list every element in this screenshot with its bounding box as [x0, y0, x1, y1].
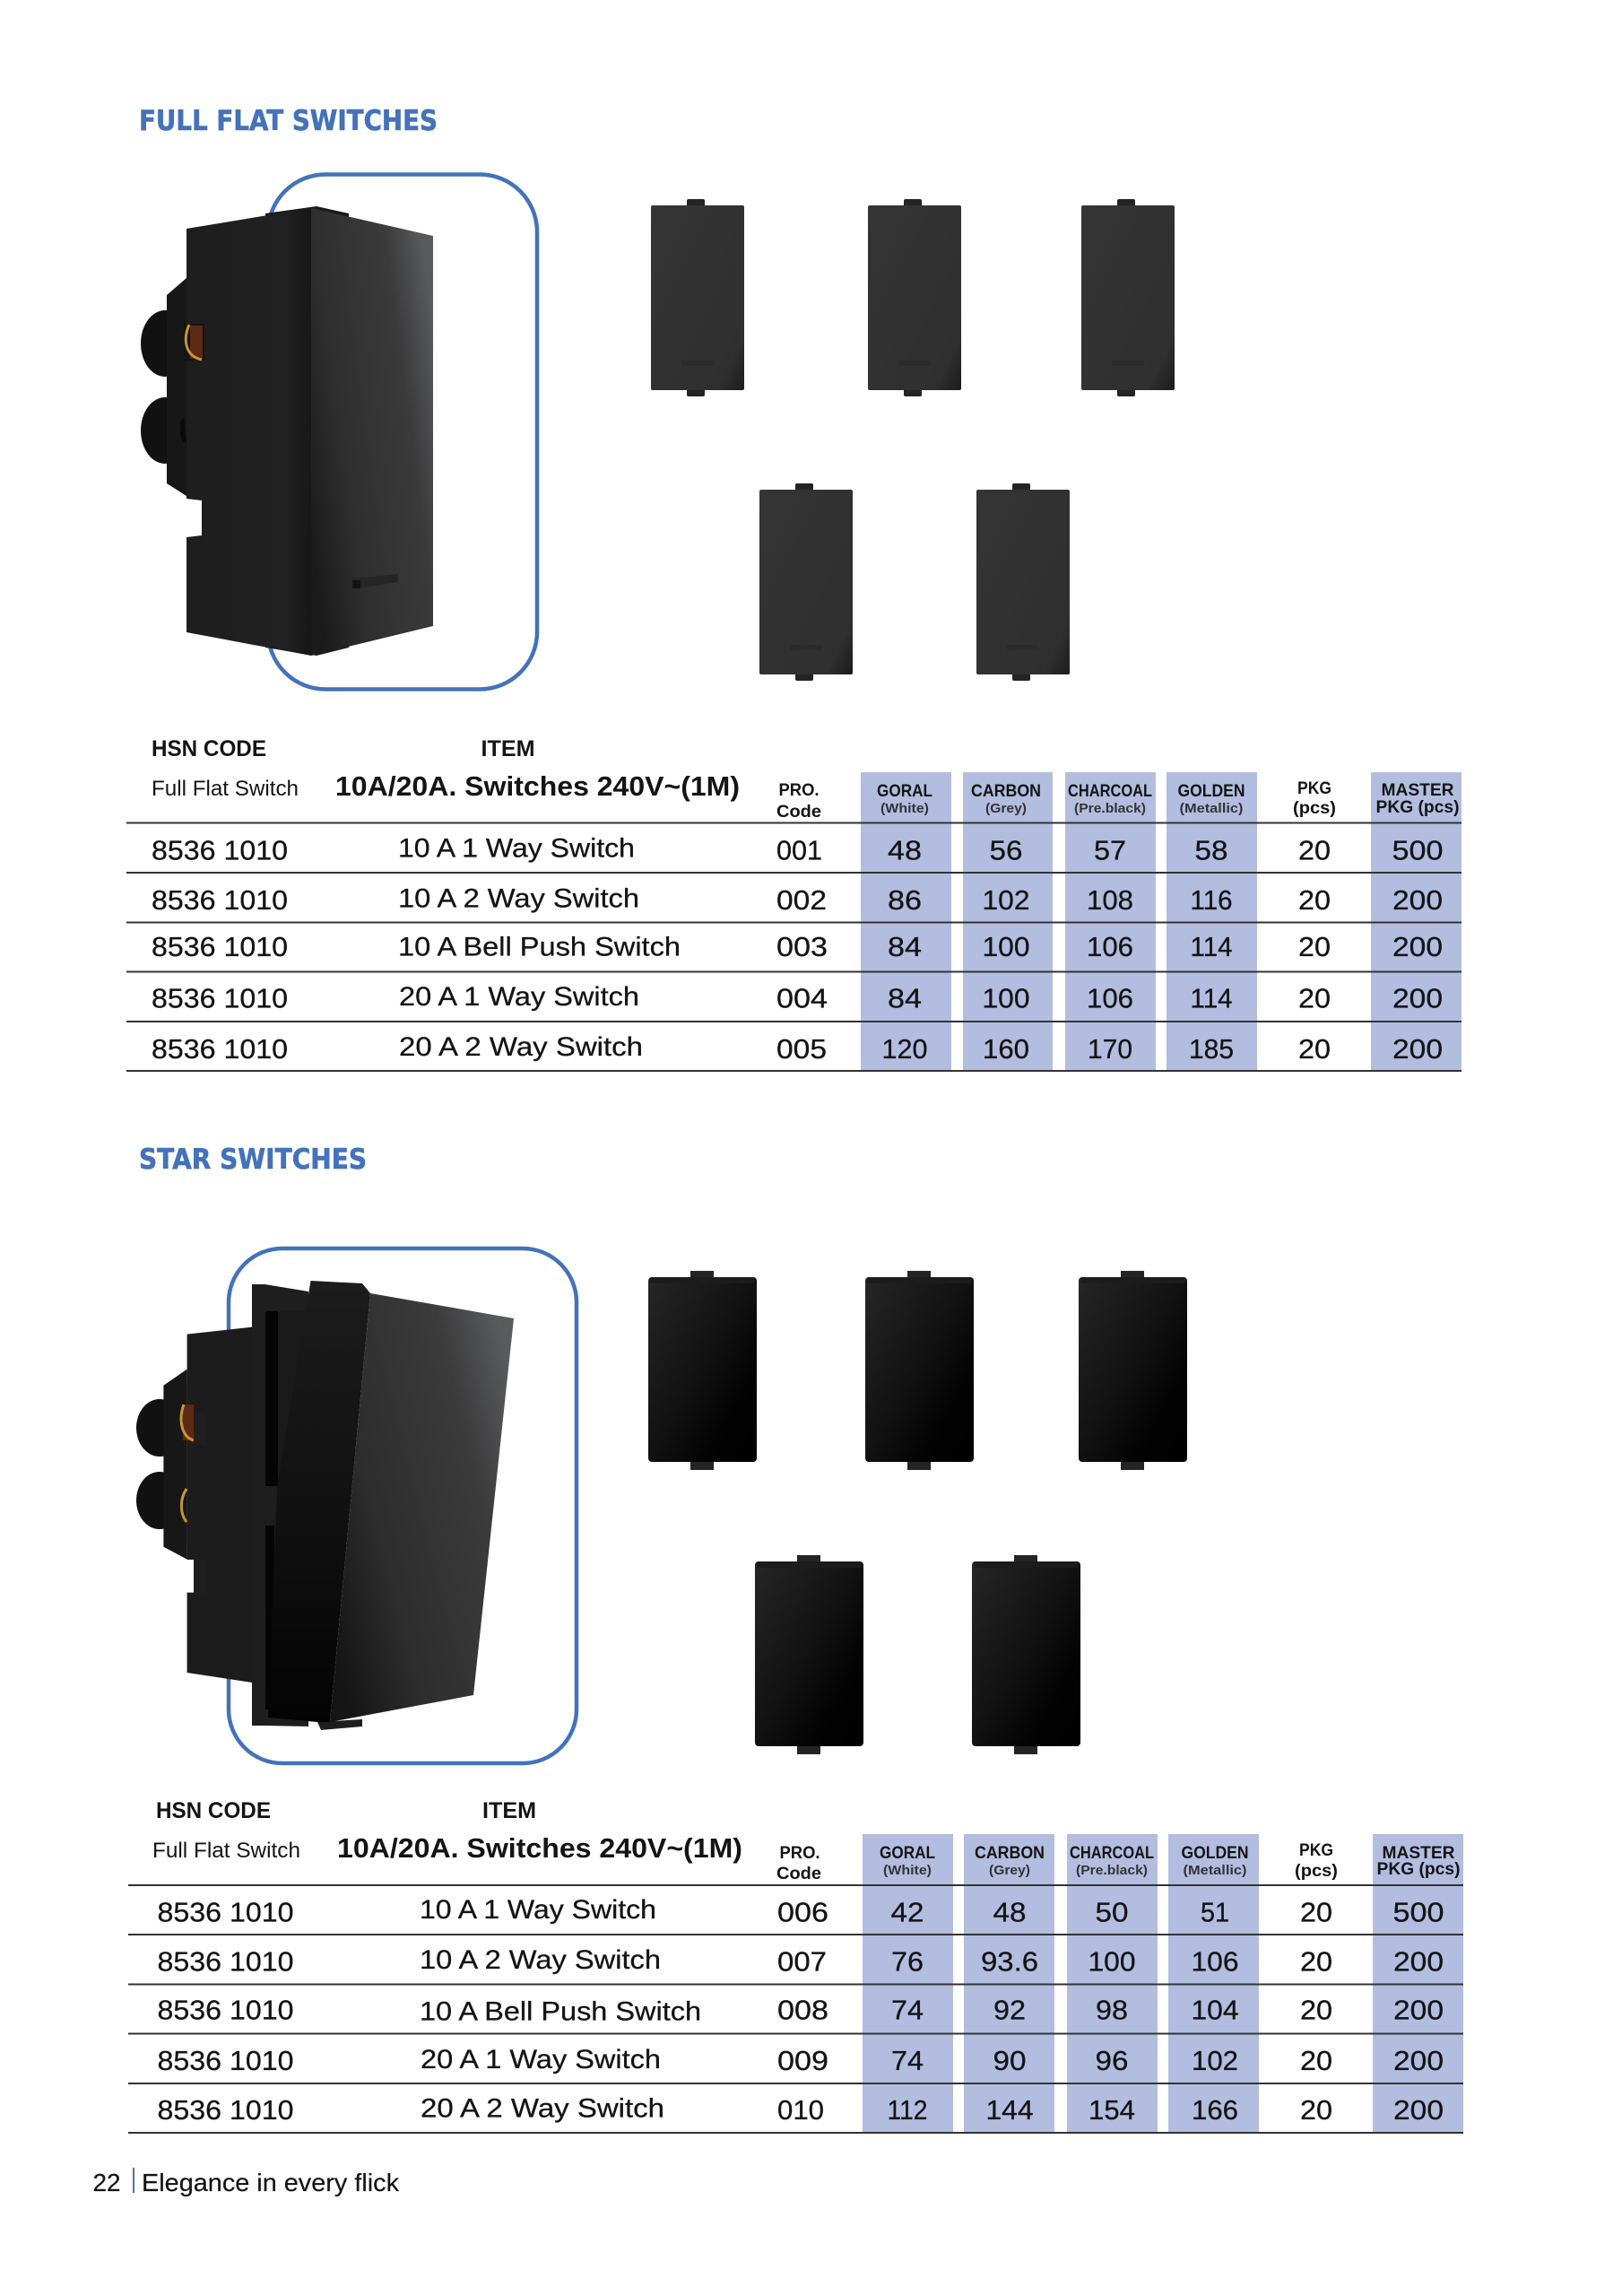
row 002: 86	[888, 884, 922, 916]
row 006: 50	[1096, 1896, 1128, 1928]
row 002: 10 A 2 Way Switch	[398, 884, 639, 913]
footer: page number and tagline: 22	[93, 2169, 120, 2196]
table header row: GOLDEN	[1178, 782, 1245, 801]
row 008: 10 A Bell Push Switch	[420, 1996, 701, 2027]
row 007: 10 A 2 Way Switch	[420, 1945, 661, 1975]
row 005: 160	[983, 1033, 1029, 1065]
row 001: 10 A 1 Way Switch	[398, 834, 635, 863]
row 006: 20	[1300, 1896, 1332, 1928]
row 006: 48	[993, 1896, 1026, 1928]
row 003: 20	[1298, 931, 1331, 962]
table header row: ITEM	[481, 736, 534, 761]
row 001: 57	[1094, 834, 1126, 866]
row 001: 48	[888, 834, 922, 866]
row 010	[158, 2093, 1444, 2126]
table header row: (Pre.black)	[1076, 1863, 1148, 1878]
row 001	[152, 834, 1444, 866]
row 003: 106	[1087, 931, 1133, 962]
row 002: 200	[1392, 884, 1443, 916]
plate: metallic	[972, 1555, 1080, 1754]
row 007: 007	[777, 1946, 827, 1977]
row 008: 74	[891, 1995, 924, 2025]
table header row: ITEM	[482, 1798, 536, 1823]
row 009: 102	[1192, 2045, 1238, 2076]
table header row: CARBON	[971, 782, 1041, 801]
row 005	[152, 1032, 1443, 1065]
row 008: 200	[1393, 1995, 1444, 2025]
row 004: 100	[983, 983, 1029, 1013]
table header row	[152, 1798, 1460, 1883]
row 002: 116	[1191, 884, 1232, 916]
row 006: 500	[1393, 1896, 1444, 1928]
table header row: (Grey)	[989, 1863, 1030, 1878]
row 004: 200	[1392, 983, 1443, 1013]
row 005: 185	[1189, 1033, 1234, 1065]
row 009: 74	[891, 2045, 924, 2076]
row 003: 003	[776, 931, 828, 962]
row 004: 106	[1087, 983, 1133, 1013]
table header row: 10A/20A. Switches 240V~(1M)	[335, 770, 740, 802]
table header row: Full Flat Switch	[152, 1839, 300, 1863]
row 004: 20	[1298, 983, 1331, 1013]
row 008: 104	[1191, 1995, 1239, 2025]
highlighted colour columns	[861, 772, 1462, 1071]
row 006: 51	[1201, 1896, 1229, 1928]
table header row: CARBON	[975, 1844, 1045, 1863]
table header row: (Metallic)	[1180, 801, 1243, 816]
product outline frame: full flat switch	[268, 174, 537, 689]
row 010: 154	[1089, 2094, 1135, 2126]
table header row: (White)	[880, 801, 929, 816]
row 001: 56	[990, 834, 1022, 866]
row 008: 008	[777, 1995, 828, 2025]
row 005: 200	[1392, 1033, 1443, 1065]
table header row: MASTER	[1381, 781, 1454, 800]
row 003: 114	[1191, 931, 1232, 962]
row 007: 93.6	[981, 1946, 1038, 1977]
row 009: 009	[777, 2045, 828, 2076]
table header row: HSN CODE	[156, 1798, 271, 1823]
row 010: 8536 1010	[158, 2094, 294, 2126]
row 010: 20	[1300, 2094, 1332, 2126]
row 010: 010	[777, 2094, 824, 2126]
plate: charcoal	[1079, 1271, 1187, 1470]
table header row: Code	[776, 803, 821, 822]
row 005: 120	[882, 1033, 927, 1065]
table header row: GORAL	[877, 782, 932, 801]
product image: star switch	[136, 1281, 514, 1730]
row 003	[152, 931, 1443, 962]
row 003: 200	[1392, 931, 1443, 962]
row 001: 58	[1194, 834, 1228, 866]
row 005: 20	[1298, 1033, 1331, 1065]
row 007: 8536 1010	[158, 1946, 294, 1977]
row 010: 144	[986, 2094, 1033, 2126]
product colour variants: star plates	[648, 1271, 1187, 1754]
table header row: GORAL	[880, 1844, 935, 1863]
row 010: 112	[888, 2094, 927, 2126]
table header row: CHARCOAL	[1070, 1844, 1154, 1863]
row 008	[158, 1995, 1444, 2027]
plate: golden	[759, 483, 853, 681]
row 002: 8536 1010	[152, 884, 288, 916]
product outline frame: star switch	[229, 1248, 577, 1763]
row 004: 84	[888, 983, 922, 1013]
product colour variants: full flat plates	[651, 199, 1175, 681]
row 007: 200	[1393, 1946, 1444, 1977]
row 008: 92	[993, 1995, 1026, 2025]
row 002: 102	[983, 884, 1029, 916]
row 005: 005	[776, 1033, 827, 1065]
footer: page number and tagline: Elegance in every flick	[142, 2169, 400, 2196]
row 002	[152, 884, 1443, 916]
row 006: 8536 1010	[158, 1896, 294, 1928]
row 007: 106	[1191, 1946, 1239, 1977]
row 001: 001	[776, 834, 822, 866]
row 006: 10 A 1 Way Switch	[420, 1895, 656, 1925]
table header row: PRO.	[780, 1844, 820, 1863]
table header row: GOLDEN	[1182, 1844, 1248, 1863]
table header row: CHARCOAL	[1068, 782, 1152, 801]
table header row: HSN CODE	[152, 736, 266, 761]
row 008: 20	[1300, 1995, 1332, 2025]
table header row: Full Flat Switch	[152, 777, 299, 801]
row 008: 8536 1010	[158, 1995, 294, 2025]
row 003: 84	[888, 931, 922, 962]
table: full flat switches pricing	[126, 736, 1462, 1071]
row 001: 500	[1392, 834, 1444, 866]
row 003: 10 A Bell Push Switch	[398, 933, 681, 961]
plate: goral	[648, 1271, 757, 1470]
row 007: 76	[891, 1946, 924, 1977]
row 008: 98	[1096, 1995, 1128, 2025]
row 006: 42	[891, 1896, 924, 1928]
table header row	[152, 736, 1460, 822]
table header row: PRO.	[778, 781, 820, 800]
row 009: 96	[1096, 2045, 1128, 2076]
plate: metallic	[976, 483, 1070, 681]
row 002: 108	[1087, 884, 1133, 916]
table header row: 10A/20A. Switches 240V~(1M)	[337, 1832, 742, 1864]
table header row: MASTER	[1383, 1844, 1455, 1863]
row 007: 20	[1300, 1946, 1332, 1977]
row 010: 200	[1393, 2094, 1444, 2126]
row 010: 166	[1192, 2094, 1238, 2126]
row 009: 20	[1300, 2045, 1332, 2076]
row 005: 8536 1010	[152, 1033, 288, 1065]
row 002: 002	[776, 884, 827, 916]
row 009: 200	[1393, 2045, 1444, 2076]
table: star switches pricing	[128, 1798, 1463, 2133]
table header row: (Grey)	[985, 801, 1027, 816]
table header row: PKG (pcs)	[1377, 1860, 1460, 1879]
table header row: PKG	[1299, 1841, 1333, 1860]
table header row: (Metallic)	[1184, 1863, 1246, 1878]
plate: golden	[755, 1555, 863, 1754]
row 001: 20	[1298, 834, 1331, 866]
table header row: (pcs)	[1295, 1862, 1338, 1881]
row 003: 100	[983, 931, 1029, 962]
plate: carbon	[865, 1271, 974, 1470]
row 004: 114	[1191, 983, 1232, 1013]
table header row: (Pre.black)	[1074, 801, 1146, 816]
row 004	[152, 982, 1443, 1013]
highlighted colour columns	[863, 1834, 1463, 2133]
row 007	[158, 1945, 1444, 1977]
row 001: 8536 1010	[152, 834, 288, 866]
product image: full flat switch	[141, 206, 433, 656]
row 004: 004	[776, 983, 828, 1013]
table header row: PKG	[1297, 779, 1331, 798]
row 005: 170	[1088, 1033, 1132, 1065]
section heading: star switches: STAR SWITCHES	[139, 1144, 367, 1176]
row 006: 006	[777, 1896, 828, 1928]
row 003: 8536 1010	[152, 931, 288, 962]
row 010: 20 A 2 Way Switch	[421, 2093, 664, 2124]
row 009: 8536 1010	[158, 2045, 294, 2076]
table header row: PKG (pcs)	[1375, 798, 1460, 817]
table header row: (pcs)	[1293, 799, 1336, 818]
row 004: 20 A 1 Way Switch	[399, 982, 639, 1012]
table header row: (White)	[883, 1863, 932, 1878]
plate: goral	[651, 199, 744, 396]
plate: charcoal	[1081, 199, 1175, 396]
plate: carbon	[868, 199, 961, 396]
section heading: full flat switches: FULL FLAT SWITCHES	[139, 105, 438, 137]
row 004: 8536 1010	[152, 983, 288, 1013]
row 006	[158, 1895, 1444, 1928]
row 005: 20 A 2 Way Switch	[399, 1032, 643, 1062]
row 009: 20 A 1 Way Switch	[421, 2045, 661, 2074]
row 009: 90	[993, 2045, 1026, 2076]
row 007: 100	[1089, 1946, 1135, 1977]
row 009	[158, 2045, 1444, 2076]
row 002: 20	[1298, 884, 1331, 916]
table header row: Code	[776, 1865, 821, 1883]
